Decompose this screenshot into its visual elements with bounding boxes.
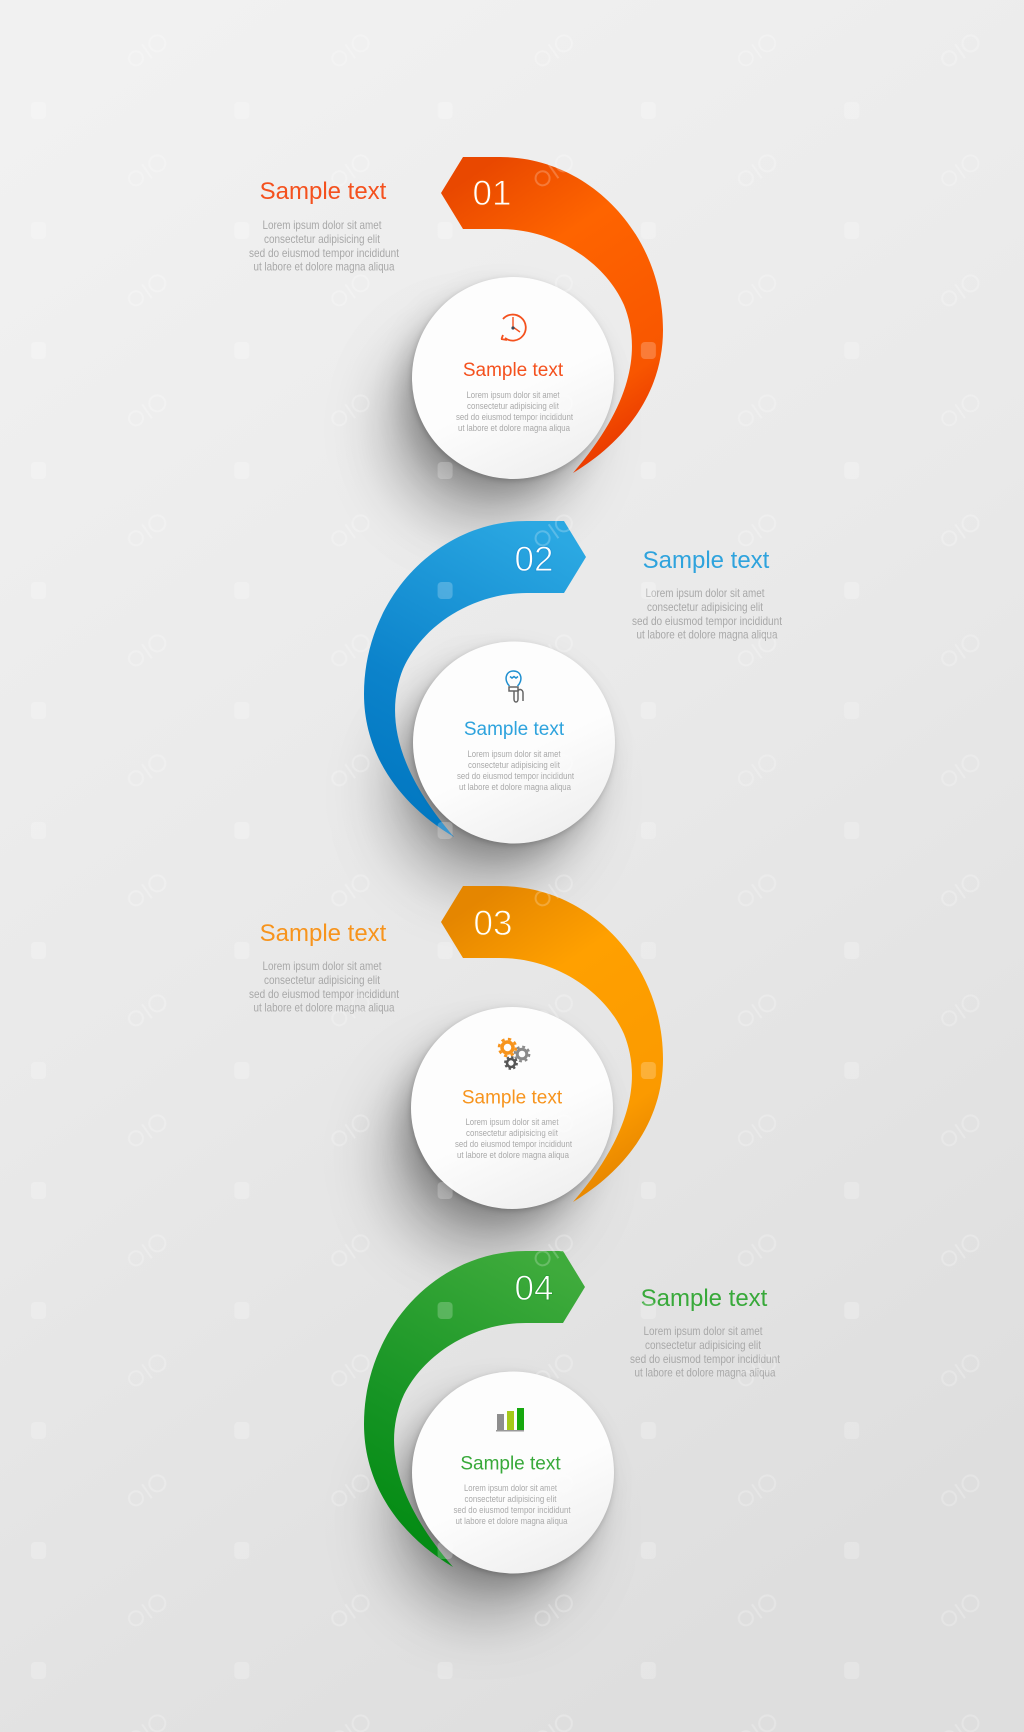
side text 1: sed do eiusmod tempor incididunt bbox=[249, 246, 400, 260]
side text 3: consectetur adipisicing elit bbox=[264, 973, 381, 987]
side heading 4: Sample text bbox=[641, 1285, 768, 1312]
side text 1: Lorem ipsum dolor sit amet bbox=[262, 218, 382, 232]
side text 2: consectetur adipisicing elit bbox=[647, 600, 764, 614]
ribbon 04 bbox=[364, 1251, 585, 1567]
edge shadow 4 bbox=[411, 1374, 613, 1576]
side text 4: ut labore et dolore magna aliqua bbox=[634, 1366, 776, 1380]
edge shadow 2 bbox=[412, 644, 614, 846]
soft shadow 3 bbox=[387, 1022, 602, 1253]
soft shadow 1 bbox=[388, 292, 603, 523]
side heading 3: Sample text bbox=[260, 920, 387, 947]
number 03: 03 bbox=[474, 904, 512, 943]
step 2 bbox=[364, 521, 783, 887]
inner text 4: Lorem ipsum dolor sit amet bbox=[464, 1483, 557, 1494]
inner text 3: sed do eiusmod tempor incididunt bbox=[455, 1139, 572, 1150]
inner text 3: ut labore et dolore magna aliqua bbox=[457, 1150, 570, 1161]
side text 4 bbox=[630, 1324, 781, 1380]
side text 3: ut labore et dolore magna aliqua bbox=[254, 1000, 395, 1014]
inner heading 4: Sample text bbox=[460, 1454, 561, 1474]
ribbon 03 bbox=[441, 886, 663, 1202]
inner text 2: consectetur adipisicing elit bbox=[468, 760, 560, 771]
inner text 1 bbox=[456, 390, 573, 434]
inner text 1: consectetur adipisicing elit bbox=[467, 401, 559, 412]
number 02: 02 bbox=[515, 540, 553, 579]
circle 4 bbox=[412, 1372, 614, 1574]
step 3 bbox=[249, 886, 663, 1253]
side text 1 bbox=[249, 218, 400, 274]
side text 2: Lorem ipsum dolor sit amet bbox=[646, 586, 765, 600]
inner text 4: ut labore et dolore magna aliqua bbox=[456, 1516, 568, 1527]
icon: clock bbox=[501, 315, 526, 341]
ribbon 02 bbox=[364, 521, 586, 837]
side text 3: sed do eiusmod tempor incididunt bbox=[249, 987, 400, 1001]
step 1 bbox=[249, 157, 663, 523]
inner text 1: Lorem ipsum dolor sit amet bbox=[466, 390, 560, 401]
side text 4: Lorem ipsum dolor sit amet bbox=[644, 1324, 763, 1338]
inner text 2: Lorem ipsum dolor sit amet bbox=[468, 749, 561, 760]
step 4 bbox=[364, 1251, 781, 1617]
inner text 3 bbox=[455, 1117, 572, 1161]
ribbon 01 bbox=[441, 157, 663, 473]
inner text 4: consectetur adipisicing elit bbox=[464, 1494, 557, 1505]
side text 1: ut labore et dolore magna aliqua bbox=[254, 260, 395, 274]
icon: light bulb bbox=[506, 671, 523, 702]
circle 3 bbox=[411, 1007, 613, 1209]
inner text 3: consectetur adipisicing elit bbox=[466, 1128, 558, 1139]
side text 2: ut labore et dolore magna aliqua bbox=[636, 628, 778, 642]
icon: bar chart bbox=[496, 1408, 524, 1432]
number 04: 04 bbox=[515, 1269, 553, 1308]
side text 2 bbox=[632, 586, 783, 642]
inner text 4: sed do eiusmod tempor incididunt bbox=[454, 1505, 571, 1516]
circle 1 bbox=[412, 277, 614, 479]
edge shadow 3 bbox=[410, 1009, 612, 1211]
icon: gears bbox=[499, 1039, 529, 1069]
inner text 1: ut labore et dolore magna aliqua bbox=[458, 423, 571, 434]
soft shadow 4 bbox=[388, 1386, 603, 1617]
inner text 2: sed do eiusmod tempor incididunt bbox=[457, 771, 574, 782]
inner text 2: ut labore et dolore magna aliqua bbox=[459, 782, 572, 793]
edge shadow 1 bbox=[411, 279, 613, 481]
side heading 2: Sample text bbox=[643, 547, 770, 574]
side text 4: sed do eiusmod tempor incididunt bbox=[630, 1352, 781, 1366]
side text 1: consectetur adipisicing elit bbox=[264, 232, 381, 246]
inner text 2 bbox=[457, 749, 574, 793]
number 01: 01 bbox=[473, 174, 511, 213]
side text 2: sed do eiusmod tempor incididunt bbox=[632, 614, 783, 628]
side text 4: consectetur adipisicing elit bbox=[645, 1338, 762, 1352]
inner text 4 bbox=[454, 1483, 571, 1527]
inner text 3: Lorem ipsum dolor sit amet bbox=[466, 1117, 559, 1128]
side heading 1: Sample text bbox=[260, 178, 387, 205]
inner heading 1: Sample text bbox=[463, 360, 564, 381]
circle 2 bbox=[413, 642, 615, 844]
inner text 1: sed do eiusmod tempor incididunt bbox=[456, 412, 573, 423]
soft shadow 2 bbox=[389, 656, 604, 887]
inner heading 2: Sample text bbox=[464, 719, 565, 740]
inner heading 3: Sample text bbox=[462, 1088, 563, 1108]
side text 3 bbox=[249, 959, 400, 1014]
side text 3: Lorem ipsum dolor sit amet bbox=[262, 959, 382, 973]
